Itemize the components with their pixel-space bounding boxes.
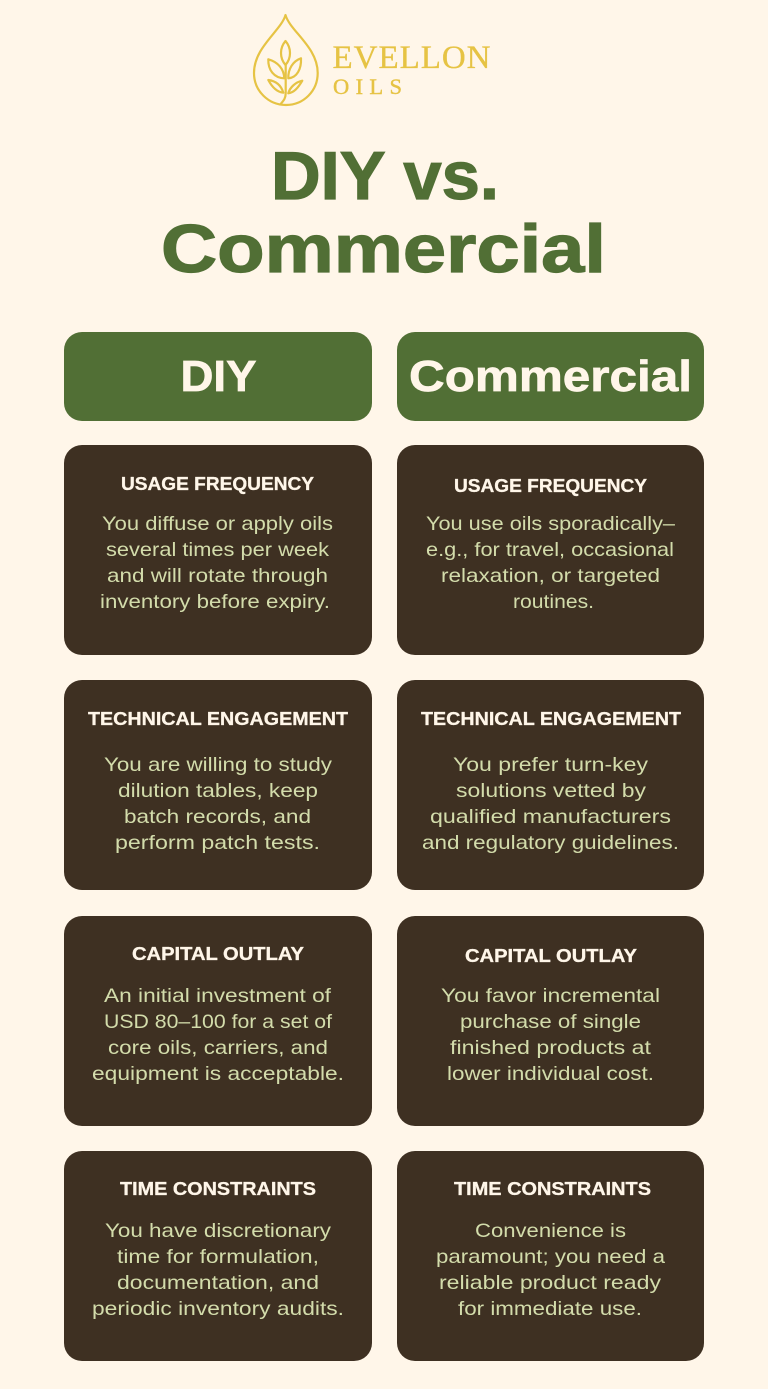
- icon: oil drop with leaves: [254, 15, 318, 105]
- panel: Commercial technical engagement: and regulatory guidelines.: [422, 832, 679, 854]
- panel: DIY capital outlay: An initial investment of: [104, 985, 332, 1007]
- panel: DIY technical engagement: perform patch tests.: [115, 832, 320, 854]
- logo wordmark: EVELLON: [332, 40, 491, 76]
- panel: DIY capital outlay: core oils, carriers, and: [108, 1037, 328, 1059]
- panel: Commercial usage frequency: You use oils sporadically–: [426, 513, 675, 535]
- panel: Commercial capital outlay: [397, 916, 704, 1126]
- panel: Commercial technical engagement: You prefer turn-key: [453, 754, 648, 776]
- panel: Commercial capital outlay: purchase of single: [460, 1011, 641, 1033]
- panel: Commercial time constraints: Convenience is: [475, 1220, 626, 1242]
- panel: Commercial technical engagement: qualified manufacturers: [430, 806, 671, 828]
- title: Commercial: [161, 211, 606, 287]
- header: Commercial: [397, 332, 704, 421]
- panel: Commercial capital outlay: finished products at: [450, 1037, 652, 1059]
- panel: DIY usage frequency: USAGE FREQUENCY: [121, 474, 314, 494]
- panel: DIY time constraints: TIME CONSTRAINTS: [120, 1179, 316, 1199]
- panel: Commercial capital outlay: CAPITAL OUTLAY: [465, 946, 637, 966]
- panel: DIY capital outlay: CAPITAL OUTLAY: [132, 944, 304, 964]
- panel: DIY time constraints: time for formulation,: [117, 1246, 319, 1268]
- panel: DIY technical engagement: You are willing to study: [104, 754, 332, 776]
- panel: Commercial time constraints: TIME CONSTRAINTS: [454, 1179, 651, 1199]
- panel: DIY usage frequency: [64, 445, 372, 655]
- panel: DIY capital outlay: [64, 916, 372, 1126]
- panel: DIY capital outlay: USD 80–100 for a set of: [104, 1011, 333, 1033]
- panel: DIY usage frequency: You diffuse or apply oils: [102, 513, 333, 535]
- panel: DIY time constraints: documentation, and: [117, 1272, 319, 1294]
- panel: Commercial technical engagement: [397, 680, 704, 890]
- panel: DIY technical engagement: batch records, and: [124, 806, 311, 828]
- panel: Commercial time constraints: reliable product ready: [439, 1272, 661, 1294]
- panel: DIY usage frequency: and will rotate through: [107, 565, 328, 587]
- header: Commercial: Commercial: [409, 352, 692, 401]
- panel: DIY time constraints: You have discretionary: [105, 1220, 331, 1242]
- panel: Commercial technical engagement: solutions vetted by: [456, 780, 646, 802]
- panel: Commercial time constraints: [397, 1151, 704, 1361]
- panel: Commercial time constraints: for immediate use.: [458, 1298, 642, 1320]
- panel: Commercial usage frequency: routines.: [513, 591, 594, 613]
- panel: DIY technical engagement: dilution tables, keep: [118, 780, 318, 802]
- panel: Commercial capital outlay: You favor incremental: [441, 985, 660, 1007]
- title: DIY vs.: [271, 138, 499, 214]
- panel: DIY capital outlay: equipment is acceptable.: [92, 1063, 344, 1085]
- panel: DIY time constraints: periodic inventory audits.: [92, 1298, 344, 1320]
- panel: DIY usage frequency: inventory before expiry.: [100, 591, 330, 613]
- panel: Commercial technical engagement: TECHNICAL ENGAGEMENT: [421, 709, 681, 729]
- logo subtitle: OILS: [333, 74, 402, 99]
- logo: [254, 15, 491, 105]
- title: [161, 138, 606, 287]
- panel: Commercial time constraints: paramount; you need a: [436, 1246, 665, 1268]
- panel: DIY technical engagement: [64, 680, 372, 890]
- panel: DIY usage frequency: several times per week: [106, 539, 329, 561]
- panel: DIY technical engagement: TECHNICAL ENGAGEMENT: [88, 709, 348, 729]
- panel: Commercial usage frequency: [397, 445, 704, 655]
- panel: Commercial usage frequency: e.g., for travel, occasional: [426, 539, 674, 561]
- panel: Commercial capital outlay: lower individual cost.: [447, 1063, 654, 1085]
- panel: Commercial usage frequency: USAGE FREQUENCY: [454, 476, 647, 496]
- panel: DIY time constraints: [64, 1151, 372, 1361]
- header: DIY: DIY: [180, 352, 256, 401]
- panel: Commercial usage frequency: relaxation, or targeted: [441, 565, 660, 587]
- header: DIY: [64, 332, 372, 421]
